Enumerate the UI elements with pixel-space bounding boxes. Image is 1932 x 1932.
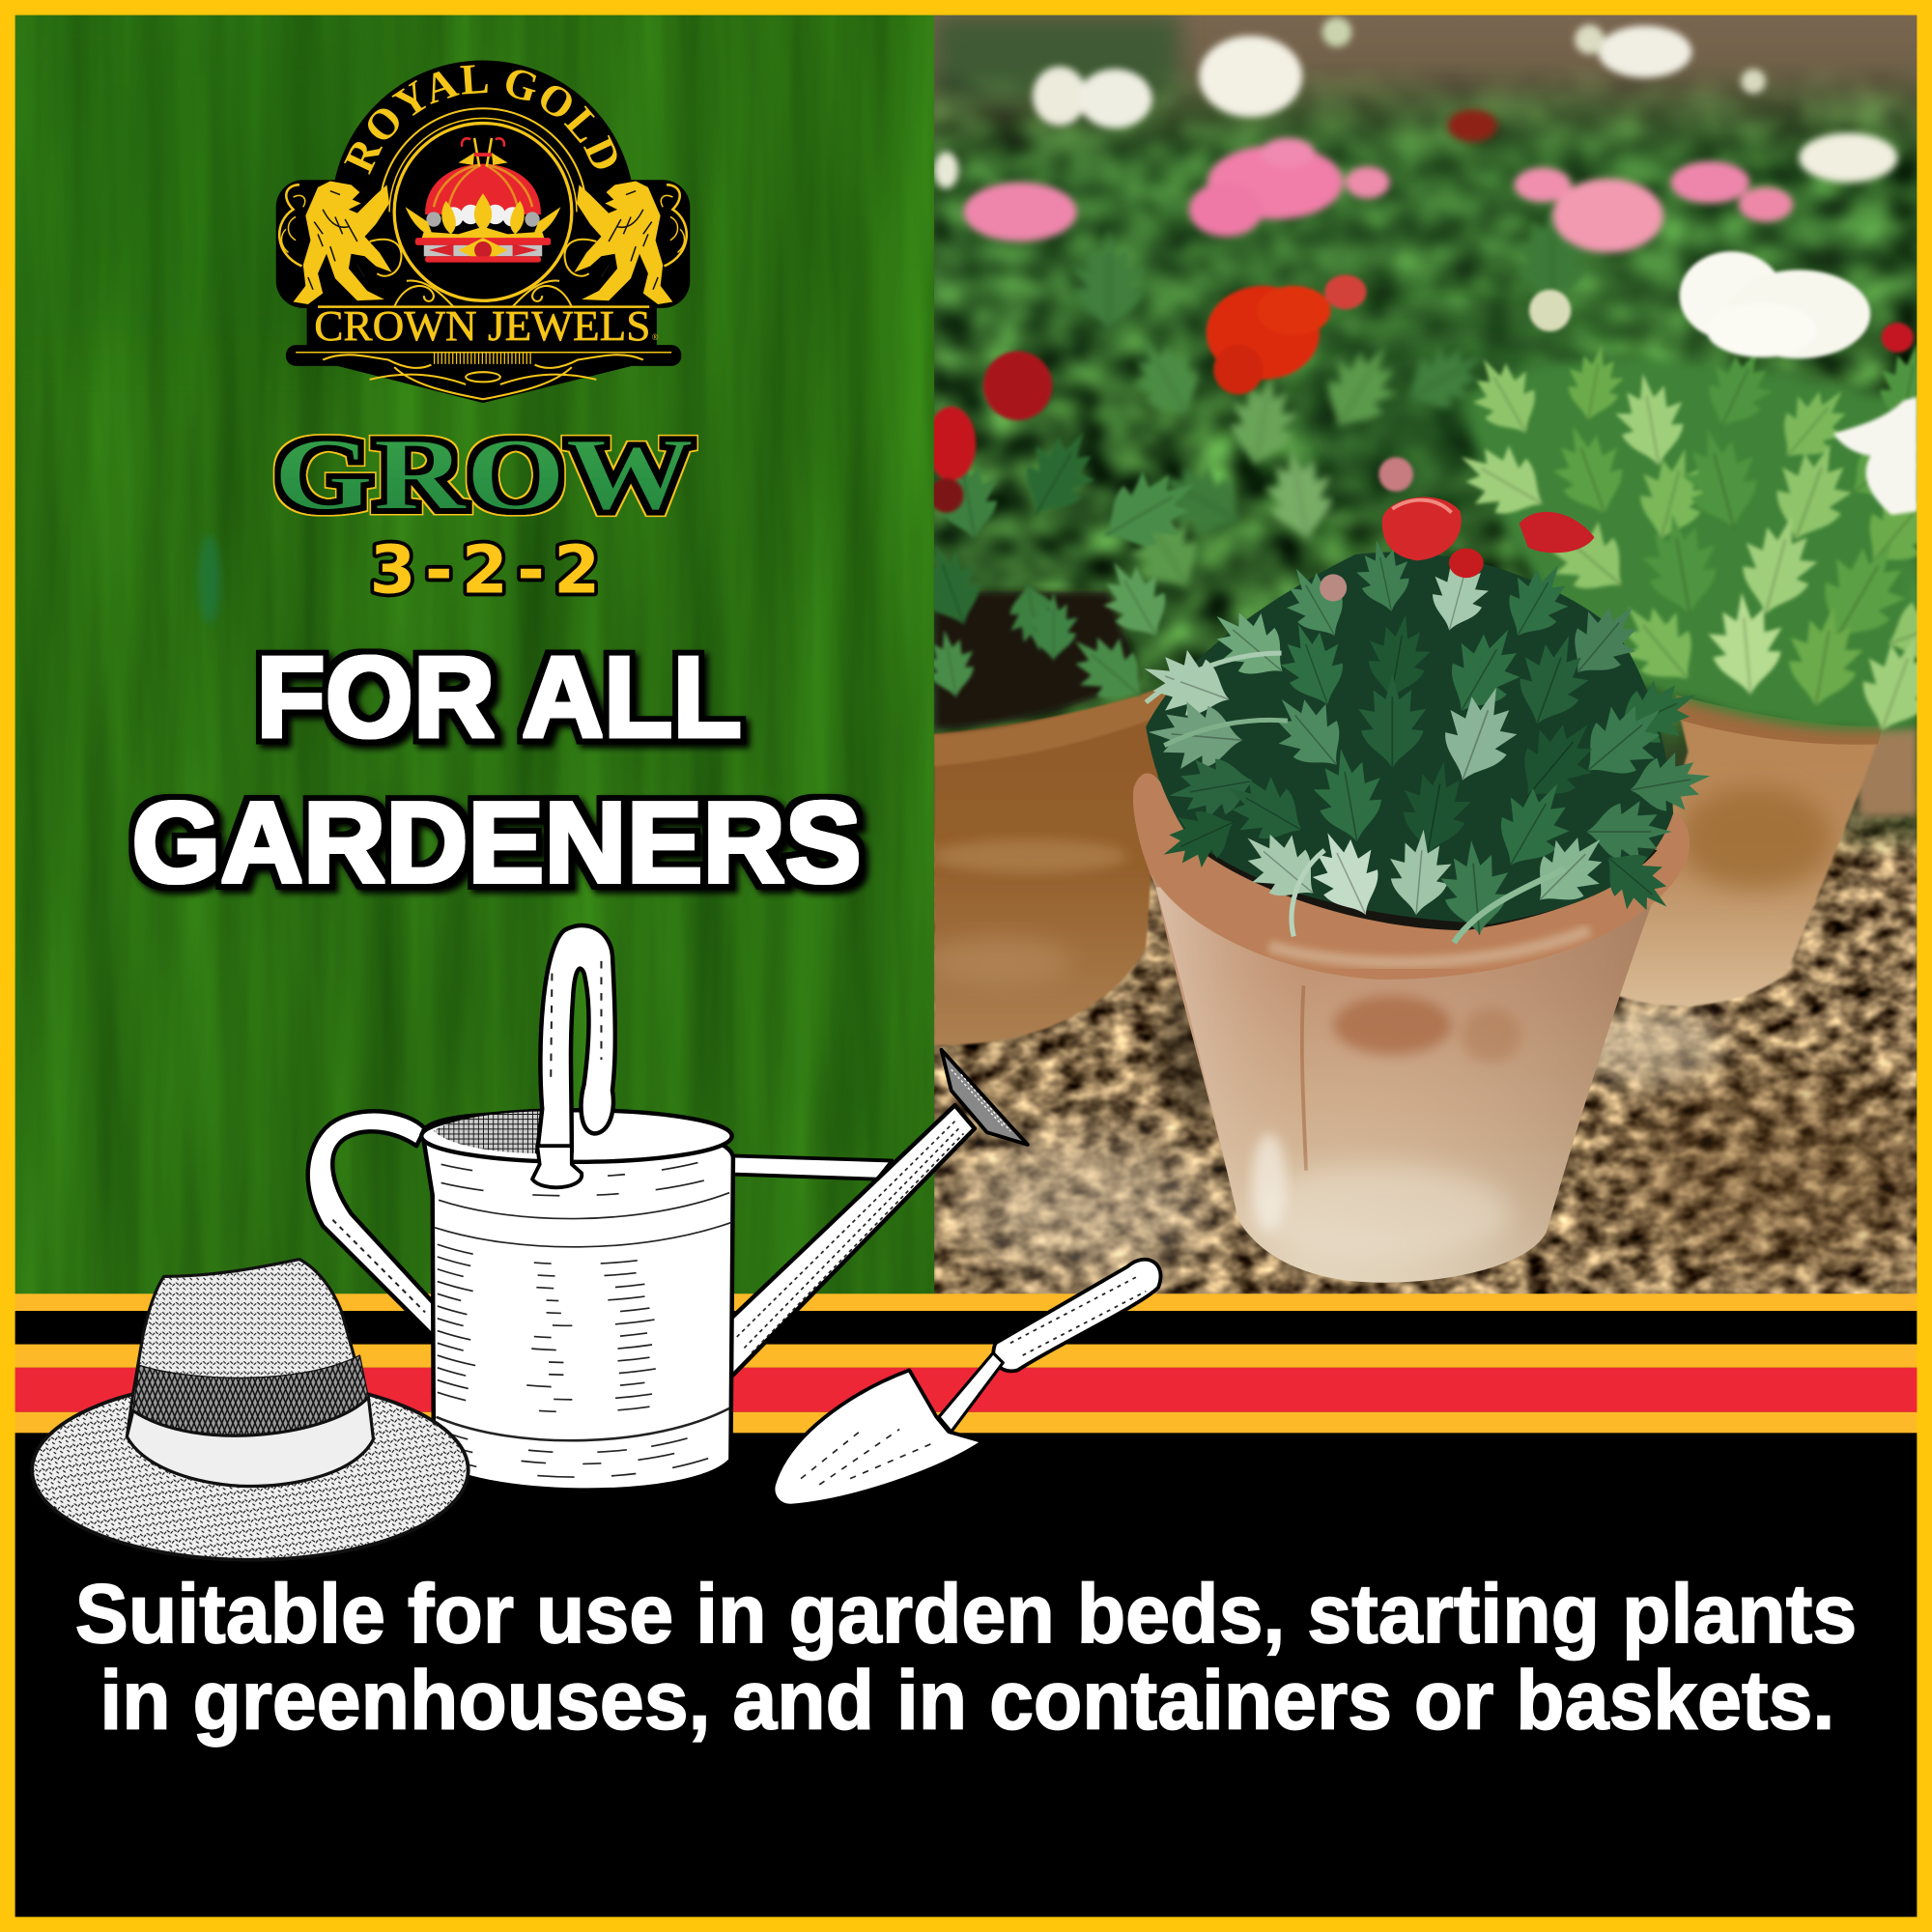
photo: blurred flowers	[934, 17, 1897, 252]
hat brim	[32, 1380, 469, 1560]
NPK ratio 3-2-2: 3-2-2	[370, 532, 600, 610]
can rim	[421, 1110, 732, 1162]
illustration: straw hat	[32, 1260, 469, 1560]
photo: gravel ground	[934, 788, 1932, 1296]
can hoop handle	[537, 925, 615, 1152]
heading: GROW: GROW	[273, 418, 694, 532]
logo text: Royal Gold: ROYAL GOLD	[344, 65, 617, 175]
panel: garden photo of potted flowers	[906, 14, 1932, 1296]
can rose	[941, 1050, 1028, 1145]
photo: main pot	[1133, 774, 1690, 1283]
logo text: Crown Jewels: CROWN JEWELS	[314, 301, 650, 350]
can spout	[724, 1105, 975, 1380]
illustration: watering can	[308, 925, 1028, 1491]
logo: Royal Gold Crown Jewels	[276, 60, 690, 404]
photo: sharp flowers	[926, 251, 1918, 515]
logo lions	[279, 182, 687, 304]
photo: main foreground plant	[1133, 535, 1716, 943]
logo scrolls	[296, 281, 671, 399]
stripes band	[14, 1293, 1918, 1433]
photo: foreground red buds	[1320, 497, 1595, 601]
illustration: garden trowel	[774, 1260, 1160, 1506]
heading line 1: FOR ALL	[256, 635, 742, 762]
panel: green textured background	[14, 14, 934, 1296]
hat crown	[127, 1260, 373, 1487]
logo registered mark: ®	[652, 332, 659, 342]
photo: middle plant	[1072, 204, 1589, 606]
heading: For all gardeners	[131, 635, 862, 907]
trowel handle	[993, 1260, 1160, 1371]
photo: main plant soil	[1182, 801, 1658, 930]
trowel blade	[774, 1370, 983, 1506]
logo badge backing	[276, 82, 690, 403]
trowel neck	[939, 1353, 1003, 1432]
bottom black panel	[14, 1433, 1918, 1918]
can bracket	[532, 1146, 582, 1187]
photo: wall and blurred foliage	[924, 14, 1922, 850]
logo crown	[406, 138, 560, 263]
can strut	[732, 1155, 892, 1179]
body text line 2: in greenhouses, and in containers or baskets.	[99, 1654, 1834, 1747]
photo: back right pot	[1616, 695, 1883, 1006]
photo: far right pot	[1848, 727, 1918, 815]
photo: left plant	[906, 415, 1213, 720]
body text line 1: Suitable for use in garden beds, starting plants	[75, 1567, 1857, 1661]
photo: right plant	[1444, 337, 1932, 745]
photo: left soil	[934, 591, 1140, 729]
hat band	[133, 1355, 368, 1435]
logo rings	[380, 108, 586, 300]
hat ribbon lower	[127, 1397, 373, 1487]
can back handle	[308, 1111, 437, 1337]
heading line 2: GARDENERS	[131, 780, 862, 907]
photo: left pot	[924, 685, 1171, 1045]
logo arc guide	[365, 93, 601, 252]
can body	[423, 1114, 733, 1491]
body text	[75, 1567, 1857, 1747]
